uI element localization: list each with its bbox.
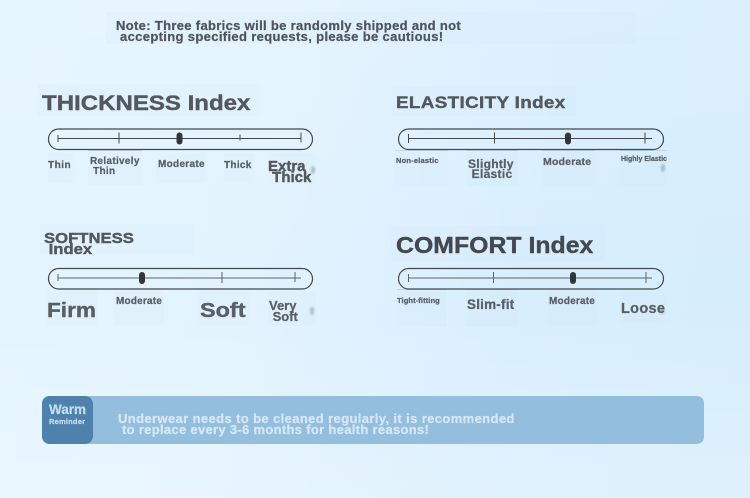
label: firm: Firm — [47, 300, 96, 322]
label: extra thick — [268, 158, 312, 186]
label: slightly elastic: Elastic — [472, 166, 512, 180]
heading: thickness: THICKNESS Index — [42, 92, 250, 115]
scale: comfort — [398, 268, 664, 290]
label: slightly elastic — [468, 157, 514, 180]
heading: softness — [44, 231, 134, 258]
label: non-elastic: Non-elastic — [396, 156, 439, 165]
note text line 2: accepting specified requests, please be cautious! — [120, 29, 443, 44]
note block — [106, 12, 636, 44]
label: moderate: Moderate — [158, 159, 205, 170]
heading: softness: SOFTNESS — [44, 231, 134, 247]
label: relatively thin: Relatively — [90, 156, 140, 167]
badge: warm reminder — [42, 396, 93, 444]
scale: thickness — [48, 128, 314, 150]
panel: thickness index — [42, 92, 314, 186]
label: extra thick: Extra — [268, 158, 306, 175]
label: highly elastic: Highly Elastic — [621, 156, 667, 163]
label: thin: Thin — [48, 160, 71, 171]
banner text line 1: Underwear needs to be cleaned regularly, it is recommended — [118, 411, 515, 426]
label: extra thick: Thick — [272, 168, 311, 186]
heading: elasticity: ELASTICITY Index — [396, 93, 566, 112]
note text line 1: Note: Three fabrics will be randomly shipped and not — [116, 18, 461, 33]
label: slightly elastic: Slightly — [468, 157, 514, 171]
scale: elasticity — [398, 128, 664, 150]
label: moderate: Moderate — [543, 156, 591, 168]
panel: comfort index — [396, 232, 665, 317]
label: thick: Thick — [224, 160, 252, 171]
scale: softness — [48, 268, 314, 290]
label: very soft — [269, 298, 298, 324]
label: very soft: Very — [269, 298, 296, 313]
badge word: reminder: Reminder — [49, 417, 85, 426]
heading: comfort: COMFORT Index — [396, 232, 593, 258]
panel: softness index — [44, 231, 314, 324]
badge word: warm: Warm — [49, 402, 86, 417]
label: very soft: Soft — [273, 308, 298, 324]
label: tight-fitting: Tight-fitting — [397, 296, 440, 305]
label: moderate: Moderate — [549, 296, 595, 307]
label: slim-fit: Slim-fit — [467, 297, 514, 312]
banner text line 2: to replace every 3-6 months for health reasons! — [122, 422, 429, 437]
label: relatively thin — [90, 156, 140, 176]
label: relatively thin: Thin — [93, 166, 115, 176]
banner: warm reminder — [42, 396, 704, 444]
label: loose: Loose — [621, 301, 665, 317]
panel: elasticity index — [396, 93, 667, 180]
label: moderate: Moderate — [116, 296, 162, 307]
heading: softness: Index — [49, 242, 92, 258]
label: soft: Soft — [200, 300, 246, 322]
